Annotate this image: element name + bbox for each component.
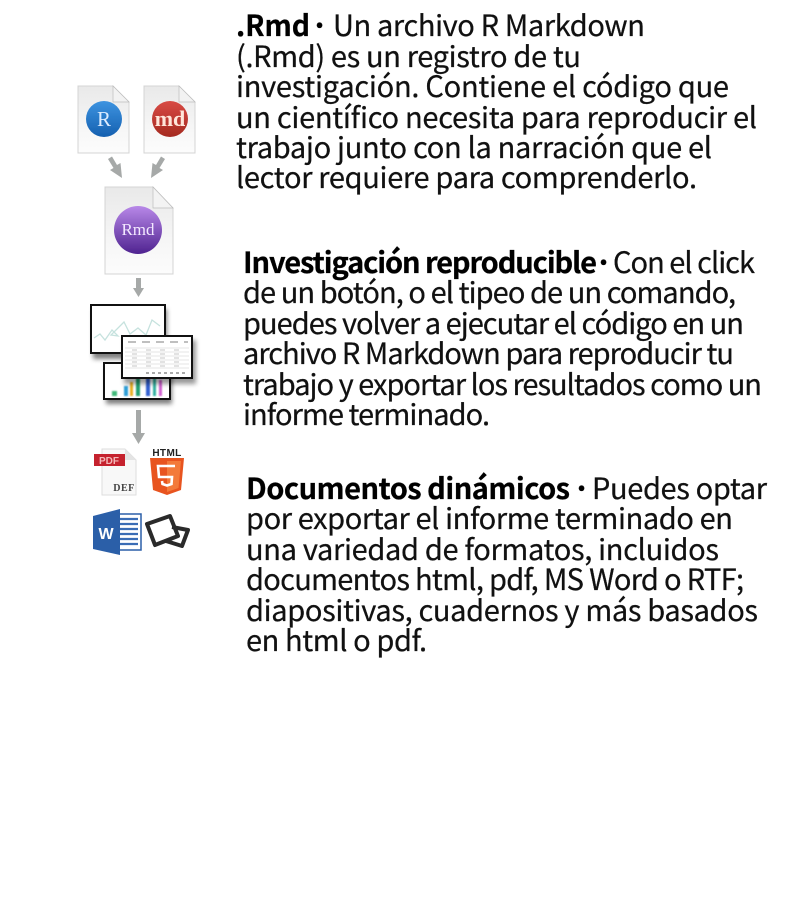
arrow: md to Rmd: [151, 156, 165, 178]
text block: .Rmd: (.Rmd) es un registro de tu: [236, 34, 581, 76]
text block: .Rmd: trabajo junto con la narración que el: [236, 125, 712, 167]
icon: PDF: [94, 449, 136, 495]
text block: Documentos dinámicos: en html o pdf.: [246, 618, 427, 660]
heading: Documentos dinámicos: Documentos dinámicos: [246, 466, 570, 508]
icon: Word: W: [98, 526, 114, 543]
text block: .Rmd: [236, 3, 757, 197]
text block: Documentos dinámicos: ·: [573, 466, 590, 508]
heading: .Rmd: .Rmd: [236, 3, 310, 45]
text block: Documentos dinámicos: documentos html, pdf, MS Word o RTF;: [246, 557, 744, 599]
icon: md file: md: [155, 106, 185, 131]
icon: Rmd file: Rmd: [121, 220, 155, 239]
text block: Investigación reproducible: [243, 240, 762, 434]
text block: Documentos dinámicos: diapositivas, cuadernos y más basados: [246, 588, 758, 630]
icon: report pages: [91, 305, 196, 404]
text block: Documentos dinámicos: una variedad de formatos, incluidos: [246, 527, 719, 569]
arrow: reports to formats: [132, 410, 145, 444]
text block: Investigación reproducible: de un botón, o el tipeo de un comando,: [243, 270, 736, 312]
text block: .Rmd: investigación. Contiene el código que: [236, 64, 729, 106]
text block: Investigación reproducible: ·: [595, 240, 612, 282]
text block: Investigación reproducible: trabajo y exportar los resultados como un: [243, 362, 762, 404]
arrow: R to Rmd: [108, 156, 122, 178]
icon: PDF: DEF: [113, 483, 135, 494]
text block: .Rmd: lector requiere para comprenderlo.: [236, 155, 697, 197]
text block: .Rmd: ·: [311, 3, 328, 45]
text block: Investigación reproducible: archivo R Markdown para reproducir tu: [243, 331, 734, 373]
text block: Documentos dinámicos: [246, 466, 768, 660]
text block: Documentos dinámicos: Puedes optar: [592, 466, 768, 508]
icon: HTML5: [150, 448, 184, 495]
text block: Documentos dinámicos: por exportar el informe terminado en: [246, 496, 733, 538]
icon: R file: R: [97, 107, 111, 131]
icon: md file: [144, 86, 195, 153]
text block: Investigación reproducible: Con el click: [613, 240, 755, 282]
icon: R file: [78, 86, 129, 153]
icon: slides: [147, 516, 188, 546]
text block: Investigación reproducible: puedes volver a ejecutar el código en un: [243, 301, 744, 343]
heading: Investigación reproducible: Investigación reproducible: [243, 240, 597, 282]
icon: Word: [93, 509, 141, 555]
icon: Rmd file: [105, 187, 173, 274]
text block: .Rmd: Un archivo R Markdown: [333, 3, 645, 45]
text block: Investigación reproducible: informe terminado.: [243, 392, 490, 434]
arrow: Rmd to reports: [133, 278, 144, 297]
icon: HTML5: HTML: [152, 448, 182, 459]
text block: .Rmd: un científico necesita para reproducir el: [236, 95, 757, 137]
icon: PDF: PDF: [99, 456, 119, 467]
